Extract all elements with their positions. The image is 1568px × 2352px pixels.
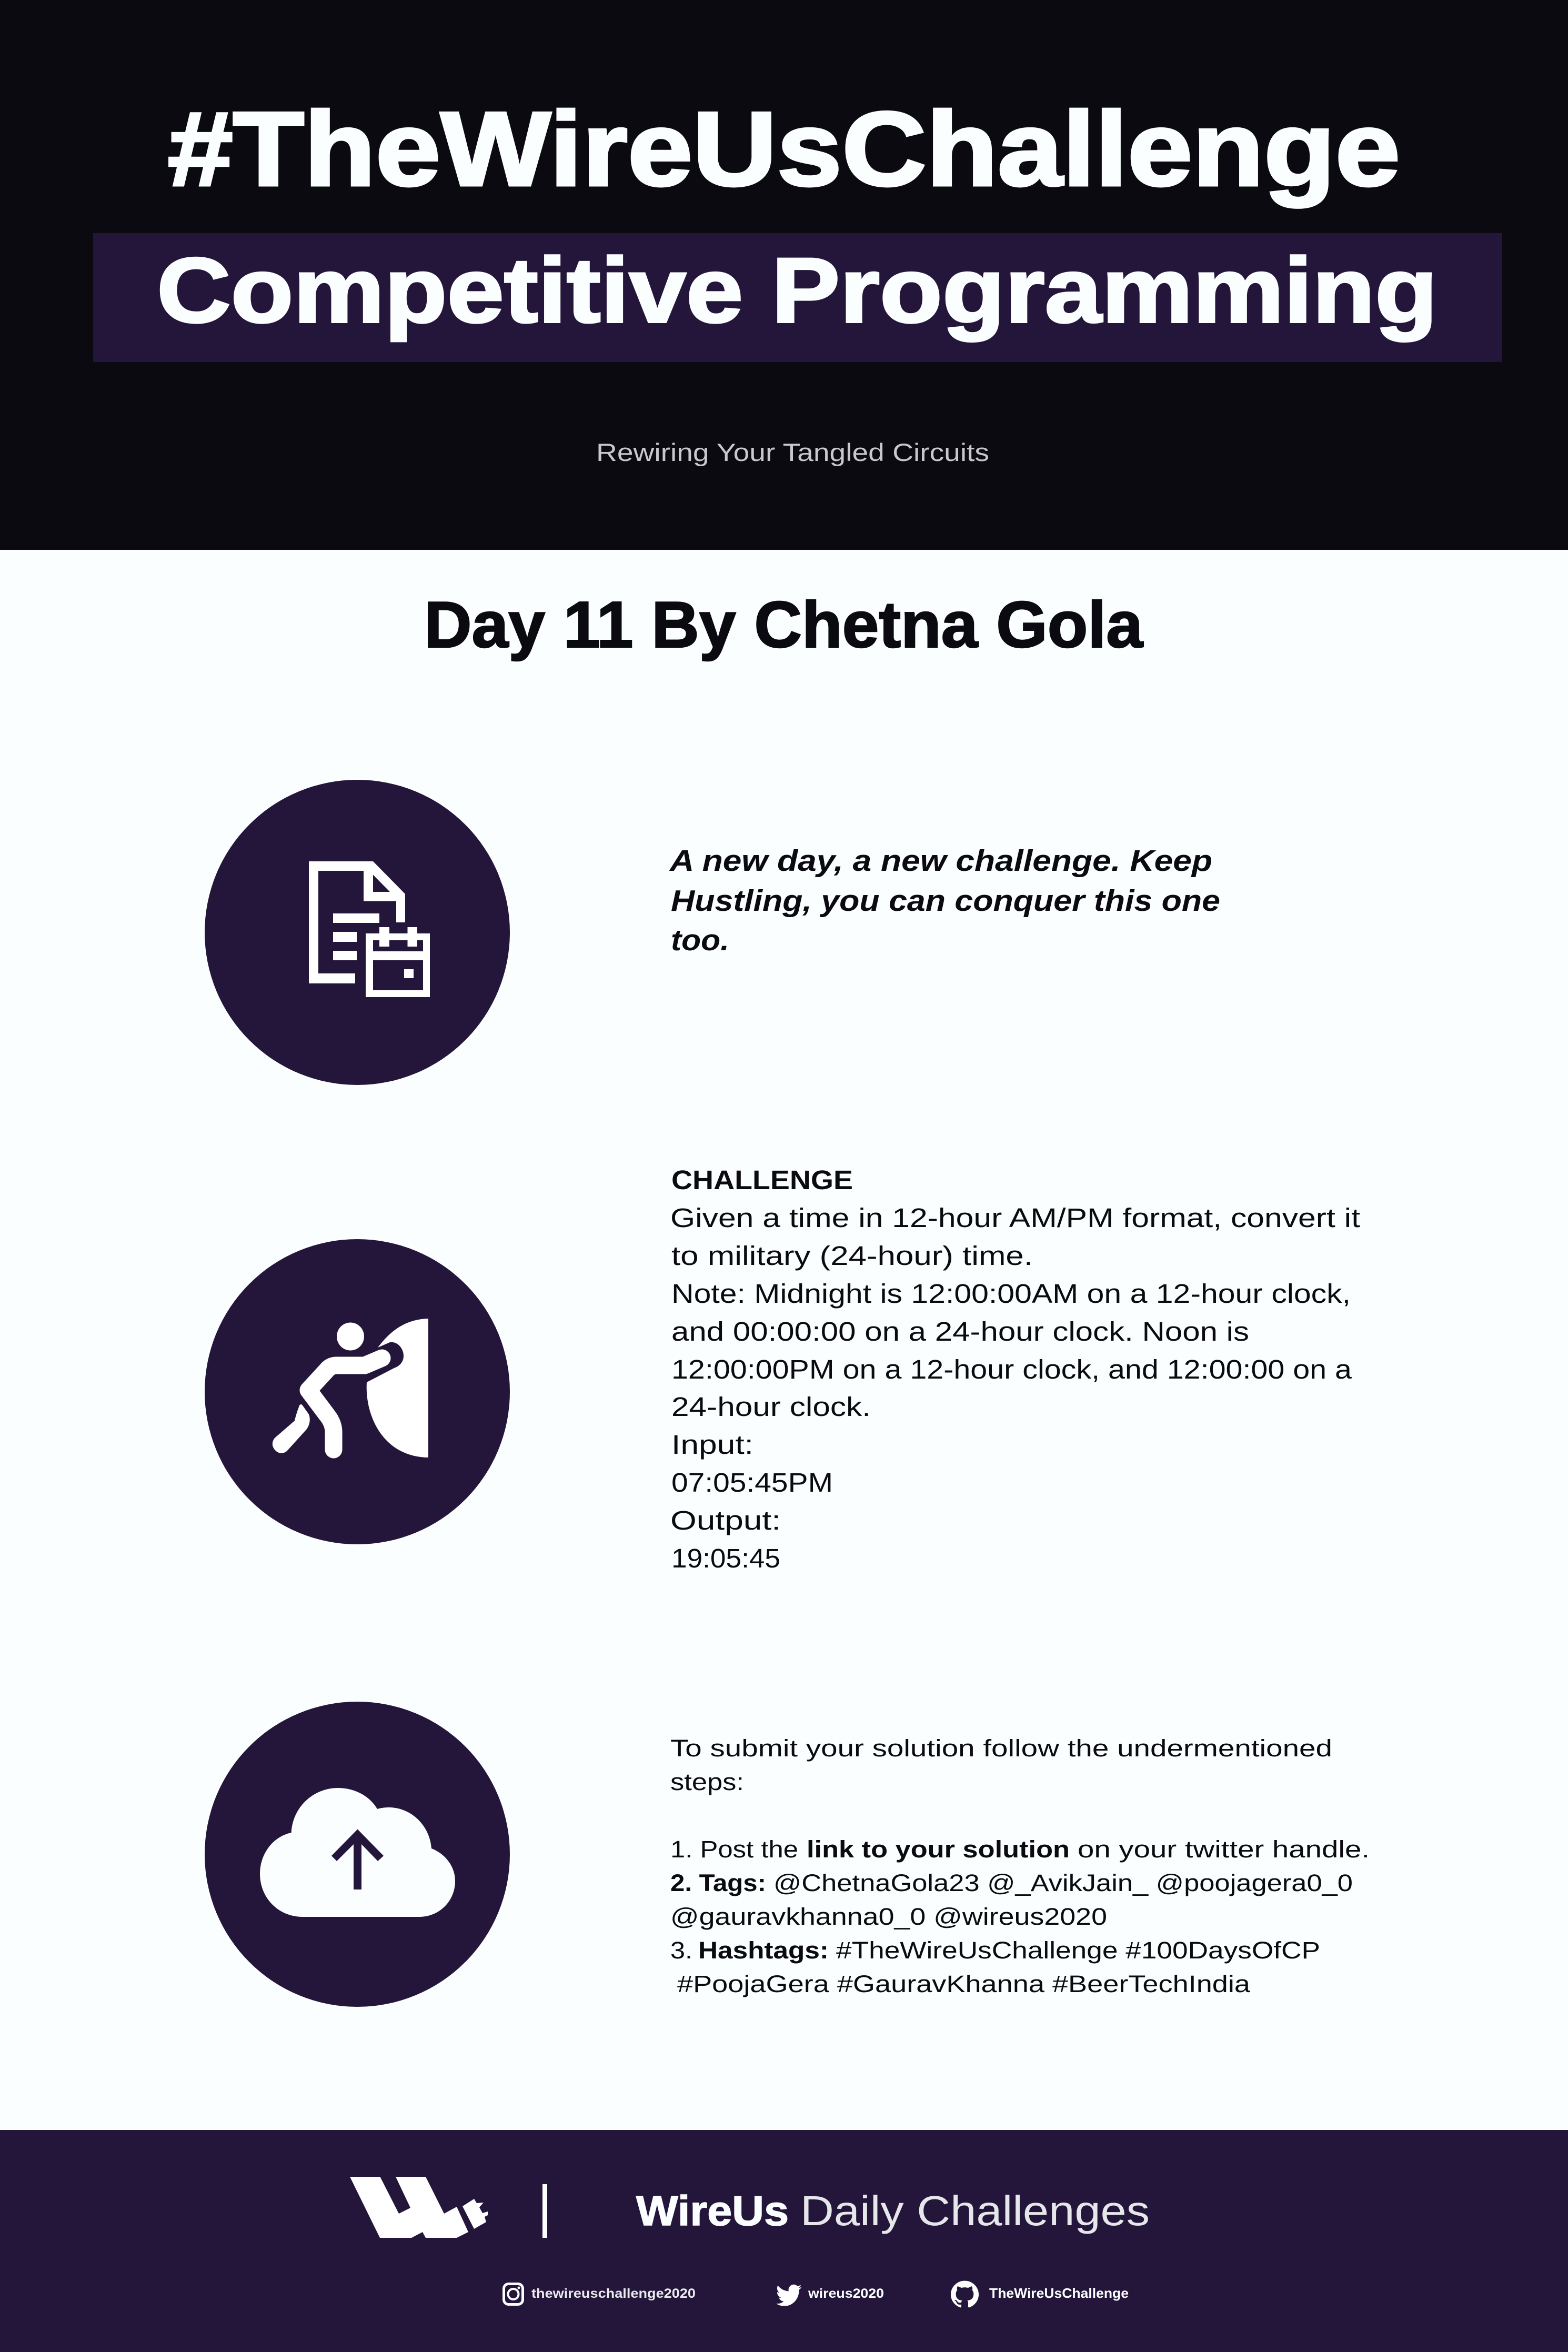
text block: submission steps	[670, 1735, 1370, 1997]
text block: challenge statement: to military (24-hour) time.	[671, 1241, 1033, 1271]
footer title	[636, 2187, 1150, 2234]
social: github	[951, 2281, 1129, 2307]
text block: submission steps: 2. Tags:	[670, 1869, 766, 1896]
text block: challenge statement: 19:05:45	[671, 1543, 780, 1573]
text block: submission steps: 3.	[670, 1937, 692, 1964]
social: github: TheWireUsChallenge	[989, 2285, 1129, 2301]
panel: footer	[0, 2130, 1568, 2352]
social: twitter	[776, 2285, 884, 2306]
text block: submission steps: 1. Post the	[670, 1836, 798, 1863]
divider	[542, 2184, 547, 2238]
subtitle band: Competitive Programming	[157, 239, 1438, 342]
text block: motivation	[669, 844, 1220, 957]
text block: motivation: A new day, a new challenge. Keep	[669, 844, 1212, 878]
text block: submission steps: To submit your solution follow the undermentioned	[670, 1735, 1332, 1762]
text block: challenge statement: CHALLENGE	[671, 1165, 853, 1195]
logo	[350, 2177, 488, 2238]
social: instagram: thewireuschallenge2020	[531, 2286, 696, 2301]
icon: person pushing boulder	[205, 1239, 510, 1544]
icon: document with calendar	[205, 780, 510, 1085]
text block: submission steps: @gauravkhanna0_0 @wireus2020	[670, 1903, 1107, 1930]
footer title: WireUs	[636, 2187, 789, 2234]
text block: submission steps: steps:	[670, 1768, 744, 1795]
social: instagram	[504, 2284, 696, 2305]
text block: submission steps: link to your solution	[807, 1836, 1070, 1863]
footer title: Daily Challenges	[800, 2187, 1150, 2234]
text block: motivation: Hustling, you can conquer this one	[671, 884, 1220, 918]
text block: challenge statement: 24-hour clock.	[671, 1392, 871, 1422]
text block: submission steps: Hashtags:	[698, 1937, 829, 1964]
text block: submission steps: #PoojaGera #GauravKhanna #BeerTechIndia	[677, 1971, 1251, 1997]
text block: submission steps: #TheWireUsChallenge #100DaysOfCP	[836, 1937, 1320, 1964]
text block: submission steps: on your twitter handle.	[1078, 1836, 1370, 1863]
text block: challenge statement: 12:00:00PM on a 12-hour clock, and 12:00:00 on a	[671, 1354, 1352, 1384]
social: twitter: wireus2020	[808, 2286, 884, 2301]
text block: challenge statement: and 00:00:00 on a 24-hour clock. Noon is	[671, 1316, 1249, 1346]
tagline: Rewiring Your Tangled Circuits	[596, 438, 989, 466]
icon: cloud upload	[205, 1702, 510, 2007]
heading: day and author: Day 11 By Chetna Gola	[424, 589, 1143, 661]
text block: challenge statement: Output:	[670, 1505, 781, 1535]
text block: challenge statement: 07:05:45PM	[671, 1468, 833, 1497]
subtitle band	[93, 233, 1502, 362]
text block: motivation: too.	[671, 923, 729, 957]
title: #TheWireUsChallenge	[168, 91, 1400, 208]
text block: challenge statement: Note: Midnight is 12:00:00AM on a 12-hour clock,	[671, 1279, 1351, 1309]
text block: challenge statement: Input:	[671, 1430, 753, 1460]
panel: header	[0, 0, 1568, 550]
text block: challenge statement	[670, 1165, 1360, 1573]
text block: submission steps: @ChetnaGola23 @_AvikJain_ @poojagera0_0	[773, 1869, 1353, 1896]
text block: challenge statement: Given a time in 12-hour AM/PM format, convert it	[670, 1203, 1360, 1233]
